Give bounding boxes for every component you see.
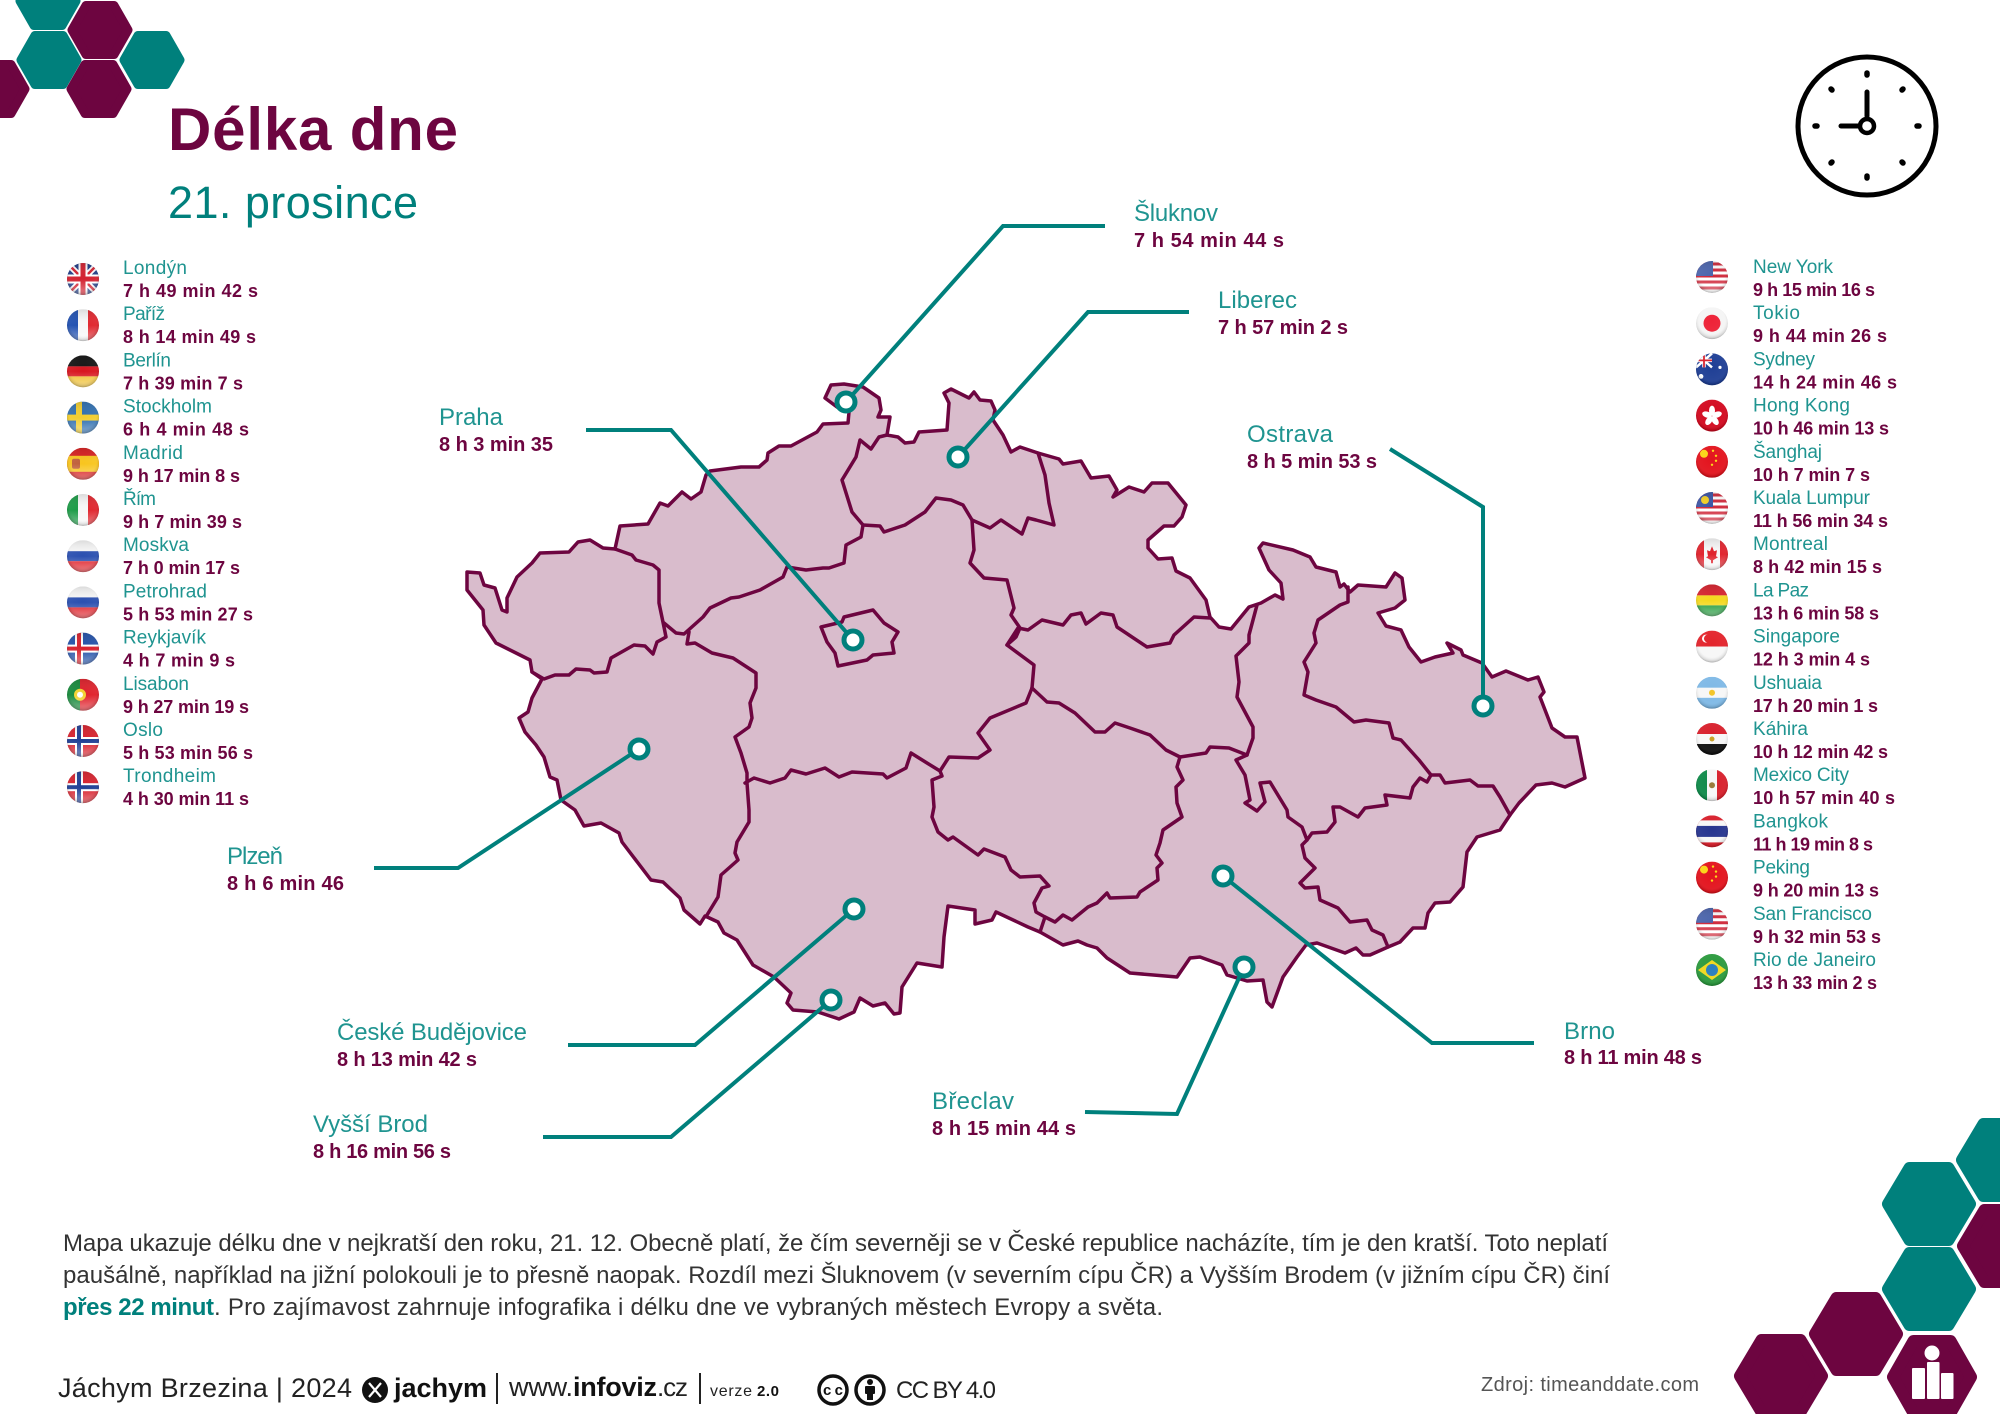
row: Oslo: Oslo bbox=[123, 720, 163, 741]
row: Berlín: Berlín bbox=[123, 350, 171, 371]
row: Řím bbox=[67, 488, 242, 532]
row: Peking bbox=[1696, 860, 1878, 896]
callout: Šluknov bbox=[837, 199, 1284, 411]
row: Mexico City: Mexico City bbox=[1753, 765, 1850, 786]
row: Hong Kong: Hong Kong bbox=[1753, 396, 1850, 417]
row: Paříž bbox=[67, 306, 256, 343]
row: Rio de Janeiro: 13 h 33 min 2 s bbox=[1753, 973, 1877, 993]
row: Montreal: Montreal bbox=[1753, 534, 1828, 555]
row: Londýn: 7 h 49 min 42 s bbox=[123, 281, 258, 301]
row: Ushuaia: 17 h 20 min 1 s bbox=[1753, 696, 1878, 716]
row: La Paz: La Paz bbox=[1753, 580, 1809, 601]
subtitle: 21. prosince bbox=[168, 177, 418, 228]
icon: clock bbox=[1798, 57, 1936, 195]
row: Madrid: 9 h 17 min 8 s bbox=[123, 466, 240, 486]
row: Kuala Lumpur bbox=[1696, 490, 1888, 527]
footer: author and license: infoviz bbox=[573, 1372, 657, 1402]
row: Bangkok bbox=[1696, 814, 1872, 850]
callout: Praha bbox=[439, 404, 862, 649]
row: Oslo: 5 h 53 min 56 s bbox=[123, 743, 253, 763]
row: Singapore: 12 h 3 min 4 s bbox=[1753, 650, 1870, 670]
row: Lisabon: 9 h 27 min 19 s bbox=[123, 697, 249, 717]
text block: description: Mapa ukazuje délku dne v nejkratší den roku, 21. 12. Obecně platí, že čím severněji se v České republice nacházíte, tím je den kratší. Toto neplatí bbox=[63, 1229, 1608, 1257]
row: San Francisco: San Francisco bbox=[1753, 904, 1872, 925]
panel: European cities list bbox=[67, 258, 258, 809]
row: Hong Kong: 10 h 46 min 13 s bbox=[1753, 419, 1889, 439]
row: Berlín bbox=[67, 352, 242, 390]
footer: author and license: .cz bbox=[657, 1372, 688, 1402]
row: Moskva: Moskva bbox=[123, 535, 189, 556]
callout: Šluknov: Šluknov bbox=[1134, 199, 1218, 227]
row: Tokio: 9 h 44 min 26 s bbox=[1753, 326, 1887, 346]
row: Petrohrad bbox=[67, 584, 252, 620]
row: Londýn bbox=[67, 260, 258, 297]
callout: Praha: 8 h 3 min 35 bbox=[439, 434, 553, 456]
row: Petrohrad: Petrohrad bbox=[123, 581, 207, 602]
row: Lisabon bbox=[67, 676, 248, 713]
row: La Paz bbox=[1696, 583, 1878, 620]
text block: description bbox=[63, 1229, 1610, 1321]
icon: X logo bbox=[362, 1377, 388, 1403]
callout: Liberec: Liberec bbox=[1218, 287, 1297, 314]
row: Sydney bbox=[1696, 352, 1896, 388]
decoration: top-left hexagons bbox=[0, 0, 180, 114]
row: Trondheim bbox=[67, 768, 248, 805]
row: Káhira: Káhira bbox=[1753, 719, 1808, 740]
footer: author and license: www. bbox=[508, 1372, 573, 1402]
callout: Brno: 8 h 11 min 48 s bbox=[1564, 1047, 1702, 1069]
callout: Vyšší Brod bbox=[313, 991, 840, 1163]
row: Trondheim: 4 h 30 min 11 s bbox=[123, 789, 249, 809]
row: Tokio bbox=[1696, 305, 1886, 342]
footer: author and license bbox=[58, 1372, 996, 1404]
row: Šanghaj: 10 h 7 min 7 s bbox=[1753, 465, 1870, 485]
row: San Francisco: 9 h 32 min 53 s bbox=[1753, 927, 1881, 947]
row: Paříž: Paříž bbox=[123, 304, 165, 325]
row: Hong Kong bbox=[1696, 398, 1888, 434]
row: Stockholm: 6 h 4 min 48 s bbox=[123, 420, 249, 440]
row: Rio de Janeiro: Rio de Janeiro bbox=[1753, 950, 1876, 971]
row: Moskva bbox=[67, 537, 240, 574]
row: Sydney: 14 h 24 min 46 s bbox=[1753, 372, 1897, 392]
row: Paříž: 8 h 14 min 49 s bbox=[123, 327, 256, 347]
row: Kuala Lumpur: Kuala Lumpur bbox=[1753, 488, 1871, 509]
row: Mexico City bbox=[1696, 767, 1894, 804]
callout: Ostrava bbox=[1247, 421, 1492, 715]
callout: Brno bbox=[1214, 867, 1702, 1069]
title: Délka dne bbox=[168, 96, 458, 163]
text block: description: přes 22 minut bbox=[63, 1294, 214, 1321]
row: Káhira: 10 h 12 min 42 s bbox=[1753, 742, 1888, 762]
row: Tokio: Tokio bbox=[1753, 303, 1800, 324]
row: Trondheim: Trondheim bbox=[123, 766, 216, 787]
decoration: bottom-right hexagons bbox=[1740, 1124, 2000, 1413]
footer: author and license: verze bbox=[710, 1383, 752, 1400]
footer: author and license: Jáchym Brzezina | 2024 bbox=[58, 1373, 352, 1403]
callout: Praha: Praha bbox=[439, 404, 504, 431]
callout: Plzeň bbox=[227, 740, 648, 895]
icon: BY bbox=[856, 1376, 884, 1404]
text block: description: . Pro zajímavost zahrnuje infografika i délku dne ve vybraných městech Evropy a světa. bbox=[214, 1294, 1163, 1321]
row: Ushuaia bbox=[1696, 675, 1878, 712]
callout: Šluknov: 7 h 54 min 44 s bbox=[1134, 230, 1284, 252]
source note: Zdroj: timeanddate.com bbox=[1481, 1374, 1699, 1396]
row: Káhira bbox=[1696, 721, 1888, 758]
row: Berlín: 7 h 39 min 7 s bbox=[123, 373, 243, 393]
callout: Ostrava: 8 h 5 min 53 s bbox=[1247, 451, 1377, 473]
footer: author and license: CC BY 4.0 bbox=[896, 1377, 996, 1404]
callout: Liberec: 7 h 57 min 2 s bbox=[1218, 317, 1348, 339]
row: Ushuaia: Ushuaia bbox=[1753, 673, 1822, 694]
footer: author and license: 2.0 bbox=[757, 1383, 779, 1400]
row: New York bbox=[1696, 259, 1874, 296]
row: Reykjavík: Reykjavík bbox=[123, 628, 206, 649]
row: Sydney: Sydney bbox=[1753, 349, 1816, 370]
row: La Paz: 13 h 6 min 58 s bbox=[1753, 603, 1879, 623]
callout: České Budějovice bbox=[337, 900, 863, 1071]
row: Montreal: 8 h 42 min 15 s bbox=[1753, 557, 1882, 577]
row: Kuala Lumpur: 11 h 56 min 34 s bbox=[1753, 511, 1888, 531]
callout: Břeclav: Břeclav bbox=[932, 1088, 1014, 1115]
row: Reykjavík bbox=[67, 630, 234, 666]
row: Moskva: 7 h 0 min 17 s bbox=[123, 558, 240, 578]
icon: CC bbox=[819, 1376, 847, 1404]
callout: Břeclav bbox=[932, 958, 1253, 1140]
row: Petrohrad: 5 h 53 min 27 s bbox=[123, 604, 253, 624]
callout: Vyšší Brod: Vyšší Brod bbox=[313, 1111, 428, 1138]
callout: Ostrava: Ostrava bbox=[1247, 421, 1334, 448]
callout: České Budějovice: České Budějovice bbox=[337, 1018, 527, 1046]
row: Stockholm: Stockholm bbox=[123, 397, 212, 418]
row: Peking: Peking bbox=[1753, 858, 1810, 879]
callout: Břeclav: 8 h 15 min 44 s bbox=[932, 1118, 1076, 1140]
row: Šanghaj: Šanghaj bbox=[1753, 441, 1822, 463]
row: Londýn: Londýn bbox=[123, 258, 187, 279]
row: Singapore bbox=[1696, 628, 1870, 666]
row: Lisabon: Lisabon bbox=[123, 674, 189, 695]
row: Mexico City: 10 h 57 min 40 s bbox=[1753, 788, 1895, 808]
callout: České Budějovice: 8 h 13 min 42 s bbox=[337, 1049, 477, 1071]
icon: logo bars bbox=[1912, 1346, 1954, 1399]
row: Stockholm bbox=[67, 398, 248, 436]
panel: world cities list bbox=[1696, 257, 1897, 993]
row: Řím: 9 h 7 min 39 s bbox=[123, 512, 242, 532]
row: Peking: 9 h 20 min 13 s bbox=[1753, 881, 1879, 901]
row: Šanghaj bbox=[1696, 441, 1870, 485]
callout: Plzeň: 8 h 6 min 46 bbox=[227, 873, 344, 895]
callout: Plzeň: Plzeň bbox=[227, 843, 283, 870]
row: Oslo bbox=[67, 722, 252, 759]
row: Singapore: Singapore bbox=[1753, 627, 1840, 648]
row: Madrid: Madrid bbox=[123, 443, 183, 464]
icon: CC: cc bbox=[823, 1382, 843, 1399]
row: Reykjavík: 4 h 7 min 9 s bbox=[123, 651, 235, 671]
map: Czech Republic regions bbox=[467, 384, 1585, 1019]
row: Řím: Řím bbox=[123, 488, 156, 510]
row: Bangkok: 11 h 19 min 8 s bbox=[1753, 834, 1873, 854]
row: San Francisco bbox=[1696, 906, 1880, 943]
row: Montreal bbox=[1696, 536, 1882, 573]
text block: description: paušálně, například na jižní polokouli je to přesně naopak. Rozdíl mezi Šluknovem (v severním cípu ČR) a Vyšším Brodem (v jižním cípu ČR) činí bbox=[63, 1261, 1610, 1289]
row: Bangkok: Bangkok bbox=[1753, 811, 1828, 832]
row: Rio de Janeiro bbox=[1696, 952, 1876, 989]
callout: Brno: Brno bbox=[1564, 1018, 1615, 1045]
row: New York: New York bbox=[1753, 257, 1834, 278]
callout: Liberec bbox=[949, 287, 1348, 466]
row: Madrid bbox=[67, 445, 240, 482]
footer: author and license: jachym bbox=[393, 1373, 487, 1403]
row: New York: 9 h 15 min 16 s bbox=[1753, 280, 1875, 300]
callout: Vyšší Brod: 8 h 16 min 56 s bbox=[313, 1141, 451, 1163]
